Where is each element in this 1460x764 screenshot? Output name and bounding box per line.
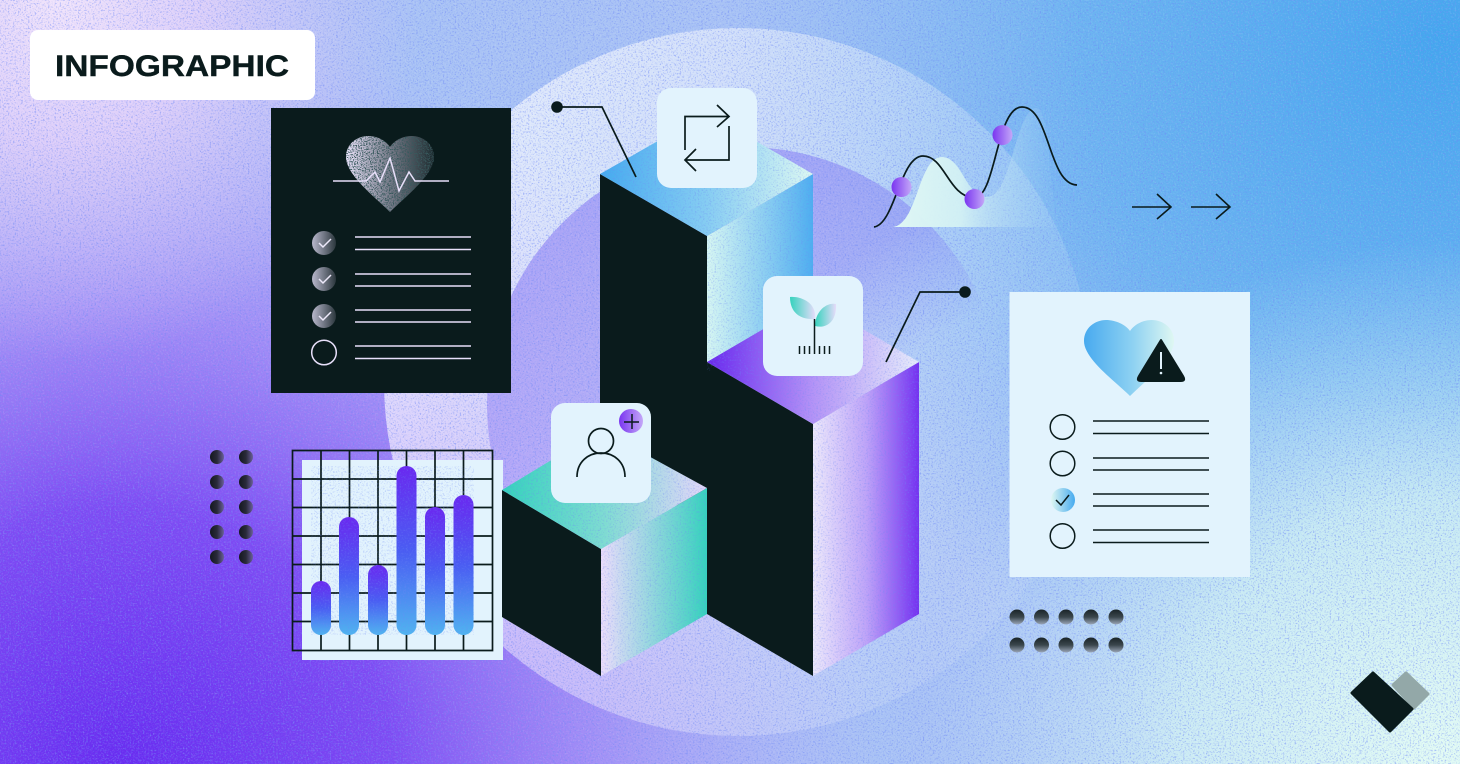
text lines	[355, 237, 471, 358]
chart grid	[292, 450, 493, 651]
label badge: INFOGRAPHIC	[55, 50, 289, 83]
right leaf	[815, 304, 836, 327]
connector line right	[886, 286, 971, 362]
icon card: sprout	[763, 276, 863, 376]
green block	[502, 430, 707, 676]
user glyph	[577, 453, 625, 477]
bars	[311, 466, 474, 635]
tall blue block	[600, 113, 813, 520]
dot grid left	[210, 450, 253, 564]
stem and ground ticks	[800, 319, 830, 354]
block: top face	[707, 300, 919, 424]
warning triangle	[1138, 340, 1184, 381]
background ring: outer circle	[384, 28, 1092, 736]
block: gradient right face	[707, 174, 813, 372]
label badge	[30, 30, 315, 100]
connector line top-left	[551, 101, 636, 177]
icon card: repeat arrows	[657, 88, 757, 188]
curve points	[892, 177, 912, 197]
block: top face	[502, 430, 707, 549]
check items	[312, 231, 336, 365]
text lines	[1093, 421, 1209, 542]
pale mountain shape	[893, 108, 1063, 227]
dot grid bottom	[1010, 610, 1124, 652]
left leaf	[790, 297, 815, 319]
heart	[1084, 320, 1174, 396]
block: gradient right face	[813, 362, 919, 676]
chart backing card	[302, 460, 503, 660]
heart with pulse	[333, 136, 449, 212]
logo	[1352, 673, 1428, 731]
block: dark left face	[707, 362, 813, 676]
curve	[874, 107, 1077, 227]
block: dark left face	[502, 490, 601, 676]
chart panel	[292, 450, 503, 660]
check items	[1050, 415, 1075, 548]
line chart decoration	[874, 107, 1077, 227]
background ring: inner circle	[487, 147, 1003, 663]
block: top face	[600, 113, 813, 236]
arrows	[1132, 194, 1230, 219]
light checklist document	[1010, 292, 1250, 577]
icon card: add user	[551, 403, 651, 503]
dark checklist document	[271, 108, 511, 393]
purple block	[707, 300, 919, 676]
block: gradient right face	[601, 488, 707, 676]
plus badge	[619, 409, 643, 433]
block: dark left face	[600, 174, 707, 520]
grain on block faces	[311, 142, 919, 676]
